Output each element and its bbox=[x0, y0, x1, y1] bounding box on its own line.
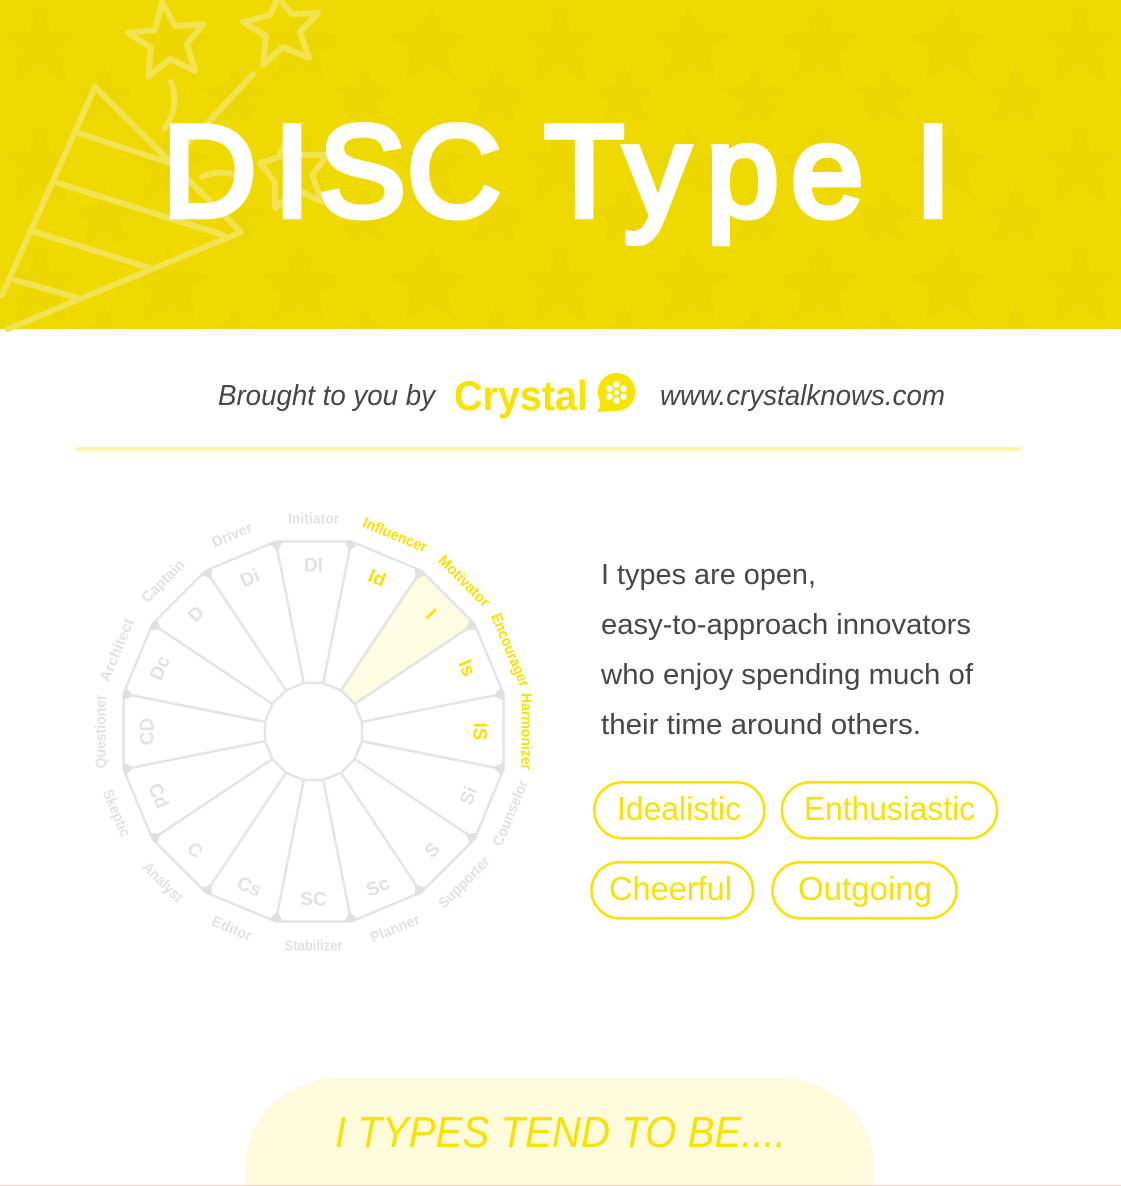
wedge codes: IS bbox=[468, 723, 490, 740]
wedge codes: SC bbox=[300, 890, 327, 910]
wedge codes: Cd bbox=[143, 780, 172, 812]
trait tags bbox=[592, 782, 997, 918]
wedge codes: Sc bbox=[363, 873, 393, 901]
header banner bbox=[0, 0, 1121, 329]
wedge codes: Cs bbox=[234, 873, 264, 902]
outer role labels: Analyst bbox=[139, 859, 186, 906]
section heading: I types tend to be bbox=[246, 1078, 873, 1186]
outer role labels: Skeptic bbox=[99, 787, 134, 840]
wedge codes: I bbox=[421, 605, 440, 624]
wedge codes: CD bbox=[138, 718, 158, 745]
wheel outline and spokes bbox=[124, 542, 504, 922]
outer role labels: Influencer bbox=[360, 514, 430, 556]
wedge codes: C bbox=[182, 838, 207, 863]
wedge codes: DI bbox=[304, 556, 323, 576]
title: DISC Type I bbox=[162, 98, 951, 244]
DISC wheel chart bbox=[92, 510, 534, 954]
outer role labels bbox=[92, 510, 534, 954]
wedge codes: Id bbox=[365, 566, 389, 592]
outer role labels: Motivator bbox=[434, 552, 493, 611]
tag: Idealistic bbox=[594, 782, 764, 838]
outer role labels: Harmonizer bbox=[518, 693, 534, 770]
outer role labels: Captain bbox=[138, 556, 188, 606]
vertex notches bbox=[121, 539, 506, 924]
tag: Cheerful bbox=[592, 862, 753, 918]
outer role labels: Driver bbox=[210, 519, 255, 551]
tag: Outgoing bbox=[772, 862, 956, 918]
outer role labels: Stabilizer bbox=[284, 938, 343, 954]
description paragraph: I types are open, bbox=[601, 559, 816, 591]
Crystal logo wordmark: Crystal bbox=[454, 372, 588, 419]
wedge codes: Is bbox=[454, 657, 479, 680]
icon: party popper bbox=[2, 0, 328, 329]
description paragraph: who enjoy spending much of bbox=[600, 659, 974, 691]
description paragraph: their time around others. bbox=[601, 709, 921, 741]
outer role labels: Planner bbox=[368, 911, 423, 947]
description paragraph: easy-to-approach innovators bbox=[601, 609, 971, 641]
brought to you by row bbox=[218, 372, 945, 419]
icon: Crystal chat bubble flower bbox=[597, 373, 636, 412]
outer role labels: Questioner bbox=[92, 694, 110, 768]
wedge codes: Di bbox=[237, 565, 263, 592]
description paragraph bbox=[600, 559, 974, 741]
outer role labels: Architect bbox=[97, 616, 138, 684]
tag: Enthusiastic bbox=[782, 782, 997, 838]
outer role labels: Initiator bbox=[288, 510, 339, 528]
highlighted wedge: I bbox=[341, 570, 474, 704]
tag: Outgoing: Outgoing bbox=[798, 870, 932, 907]
outer role labels: Editor bbox=[209, 913, 255, 945]
wedge codes: D bbox=[184, 602, 209, 627]
outer role labels: Supporter bbox=[435, 853, 494, 912]
tag: Cheerful: Cheerful bbox=[609, 870, 732, 907]
wedge codes: Dc bbox=[146, 653, 175, 683]
sponsor text: Brought to you by bbox=[218, 380, 436, 412]
website url: www.crystalknows.com bbox=[660, 380, 945, 412]
tag: Idealistic: Idealistic bbox=[617, 790, 741, 827]
tag: Enthusiastic: Enthusiastic bbox=[804, 790, 975, 827]
wedge codes bbox=[138, 556, 490, 910]
section heading: I types tend to be: I TYPES TEND TO BE.... bbox=[335, 1108, 786, 1157]
wedge codes: Si bbox=[456, 784, 482, 808]
outer role labels: Encourager bbox=[487, 611, 533, 690]
outer role labels: Counselor bbox=[490, 777, 532, 849]
wedge codes: S bbox=[421, 839, 445, 863]
